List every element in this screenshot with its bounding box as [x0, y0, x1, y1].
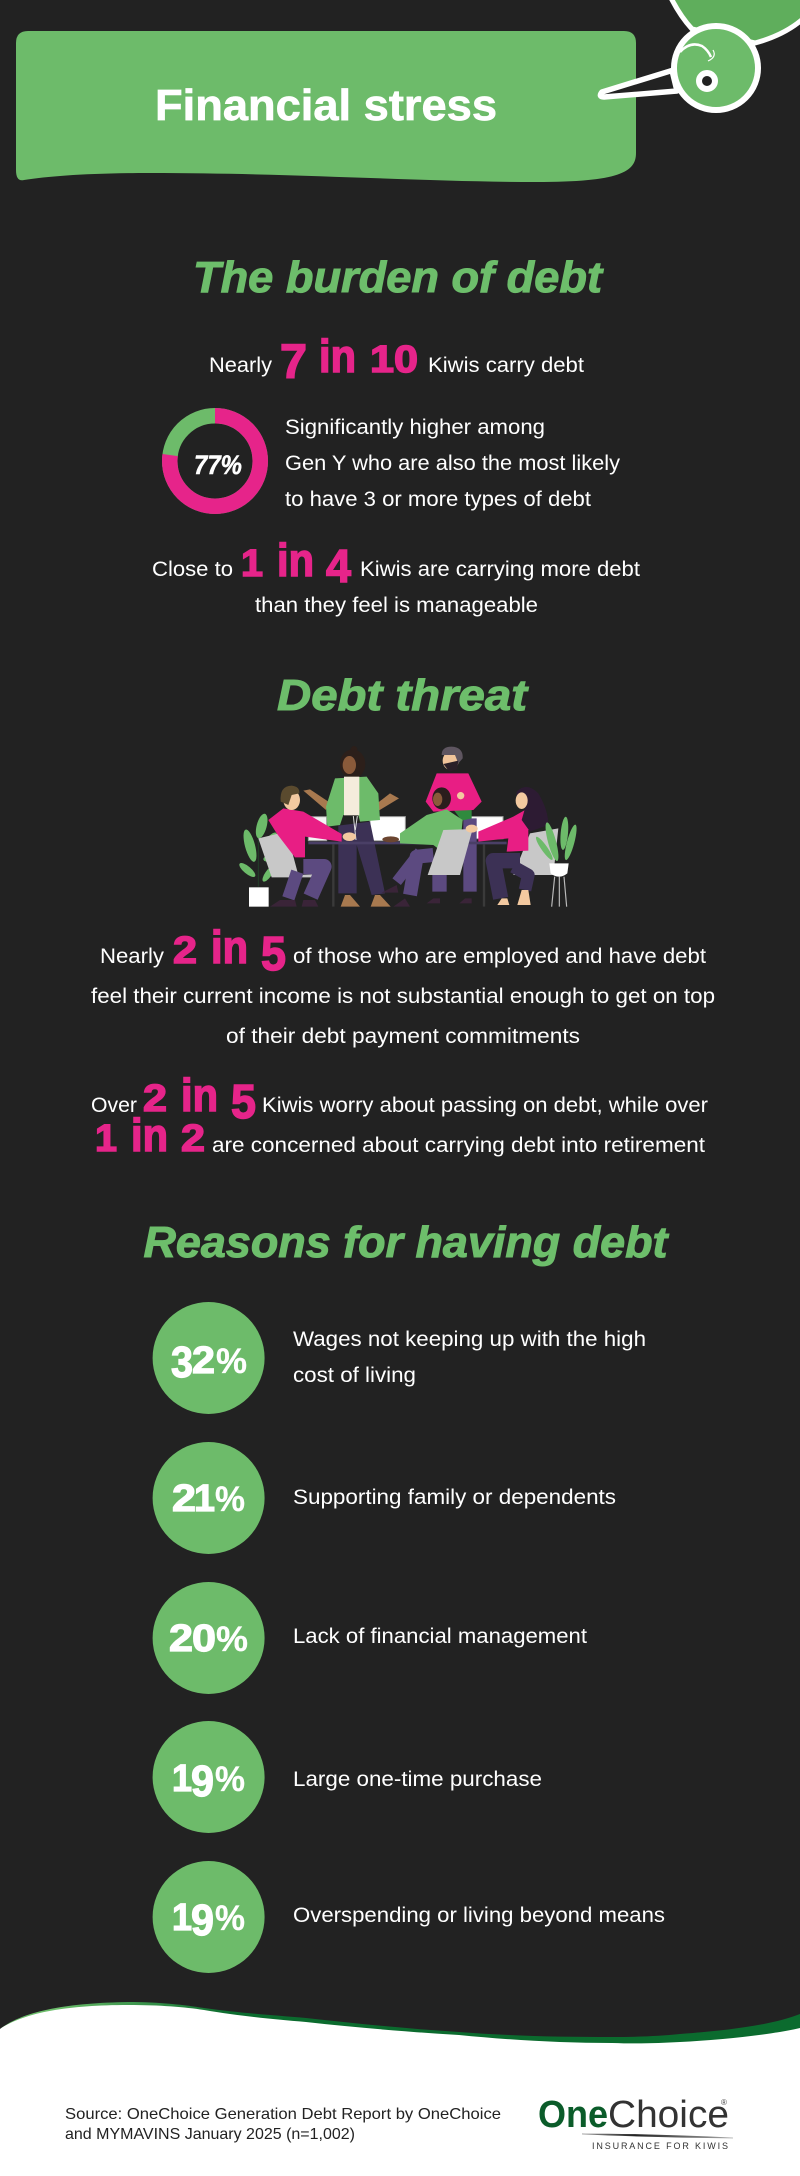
stat: over 2 in 5, over 1 in 2: are concerned about carrying debt into retirement	[212, 1134, 705, 1157]
stat: nearly 2 in 5: 2	[173, 930, 197, 972]
stat: close to 1 in 4: than they feel is manageable	[255, 594, 538, 617]
stat: nearly 7 in 10: 10	[370, 339, 418, 381]
left plant	[237, 812, 284, 907]
stat: close to 1 in 4: in	[277, 534, 314, 586]
reason: 20%: %	[216, 1620, 248, 1659]
reason: 32%: Wages not keeping up with the high	[293, 1328, 646, 1351]
stat: close to 1 in 4: Kiwis are carrying more debt	[360, 558, 640, 581]
logo: OneChoice: INSURANCE FOR KIWIS	[592, 2141, 728, 2151]
reason: 19% large purchase	[153, 1721, 542, 1833]
reason: 32%: %	[216, 1342, 247, 1381]
seated man centre	[382, 787, 473, 907]
stat: close to 1 in 4: Close to	[152, 558, 233, 581]
reason: 19% large purchase: 1	[172, 1758, 192, 1800]
stat: close to 1 in 4: 1	[241, 543, 263, 585]
reason: 20%: Lack of financial management	[293, 1625, 587, 1648]
reason: 19% overspending: Overspending or living beyond means	[293, 1904, 665, 1927]
stat: over 2 in 5, over 1 in 2: 2	[143, 1078, 167, 1120]
stat: nearly 2 in 5: feel their current income is not substantial enough to get on top	[91, 985, 715, 1008]
reason: 32%: 2	[192, 1340, 215, 1382]
standing man	[426, 747, 482, 903]
stat: nearly 2 in 5	[91, 921, 715, 1048]
stat: over 2 in 5, over 1 in 2: Over	[91, 1094, 137, 1117]
text block: Gen Y: Significantly higher among	[285, 416, 545, 439]
panel: header banner	[16, 31, 636, 182]
reason: 19% overspending: 1	[172, 1897, 192, 1939]
stat: nearly 7 in 10: Kiwis carry debt	[428, 354, 584, 377]
footer wave	[0, 2002, 800, 2176]
reason: 20%: 0	[192, 1618, 216, 1660]
reason: 19% overspending: 9	[191, 1896, 214, 1945]
stat: over 2 in 5, over 1 in 2: Kiwis worry about passing on debt, while over	[262, 1094, 708, 1117]
text block: Gen Y	[285, 416, 621, 511]
source note: Source: OneChoice Generation Debt Report by OneChoice	[65, 2106, 501, 2123]
title: Financial stress	[155, 81, 497, 130]
stat: over 2 in 5, over 1 in 2: 1	[95, 1118, 117, 1160]
logo: OneChoice: Choice	[608, 2094, 729, 2136]
logo: OneChoice: One	[538, 2094, 608, 2136]
logo: OneChoice	[538, 2094, 733, 2151]
source note	[65, 2106, 501, 2143]
reason: 21%: %	[215, 1480, 245, 1519]
stat: over 2 in 5, over 1 in 2: in	[131, 1109, 168, 1161]
stat: nearly 2 in 5: Nearly	[100, 945, 165, 968]
heading: debt threat: Debt threat	[277, 671, 530, 720]
reason: 32%: cost of living	[293, 1364, 416, 1387]
stat: nearly 7 in 10: 7	[280, 336, 307, 389]
stat: close to 1 in 4: 4	[326, 540, 351, 592]
reason: 19% large purchase: 9	[191, 1757, 214, 1806]
stat: over 2 in 5, over 1 in 2: in	[181, 1069, 218, 1121]
source note: and MYMAVINS January 2025 (n=1,002)	[65, 2126, 355, 2143]
table	[308, 842, 507, 907]
seated man left	[258, 786, 356, 907]
reason: 19% overspending: %	[215, 1899, 245, 1938]
chart: 77% donut: 77%	[194, 450, 242, 480]
stat: nearly 2 in 5: of their debt payment commitments	[226, 1025, 580, 1048]
seated woman right	[466, 787, 558, 905]
standing woman	[303, 746, 399, 907]
logo: OneChoice: ®	[721, 2098, 727, 2107]
heading: the burden of debt: The burden of debt	[193, 253, 604, 302]
stat: nearly 2 in 5: in	[211, 921, 248, 973]
stat: over 2 in 5, over 1 in 2: 2	[181, 1118, 205, 1160]
stat: nearly 7 in 10	[209, 330, 584, 389]
reason: 32%: 3	[171, 1338, 193, 1387]
text block: Gen Y: Gen Y who are also the most likely	[285, 452, 621, 475]
stat: nearly 7 in 10: in	[319, 330, 356, 382]
stat: close to 1 in 4	[152, 534, 640, 617]
reason: 20%: 2	[169, 1618, 193, 1660]
right plant	[534, 816, 579, 907]
stat: nearly 2 in 5: of those who are employed and have debt	[293, 945, 706, 968]
stat: nearly 2 in 5: 5	[261, 928, 286, 981]
illustration: team around a table	[237, 746, 579, 907]
reason: 19% overspending	[153, 1861, 665, 1973]
reason: 20%	[153, 1582, 587, 1694]
reason: 21%	[153, 1442, 616, 1554]
stat: nearly 7 in 10: Nearly	[209, 354, 273, 377]
reason: 21%: Supporting family or dependents	[293, 1486, 616, 1509]
reason: 21%: 2	[172, 1478, 196, 1520]
stat: over 2 in 5, over 1 in 2: 5	[231, 1076, 256, 1129]
reason: 19% large purchase: %	[215, 1760, 245, 1799]
reason: 19% large purchase: Large one-time purchase	[293, 1768, 542, 1791]
reason: 32%	[153, 1302, 646, 1414]
stat: over 2 in 5, over 1 in 2	[91, 1069, 708, 1161]
icon: kiwi bird	[600, 0, 800, 110]
reason: 21%: 1	[194, 1478, 215, 1520]
text block: Gen Y: to have 3 or more types of debt	[285, 488, 591, 511]
chart: 77% donut	[170, 416, 260, 506]
laptops	[308, 817, 503, 841]
heading: reasons for having debt: Reasons for having debt	[144, 1218, 670, 1267]
